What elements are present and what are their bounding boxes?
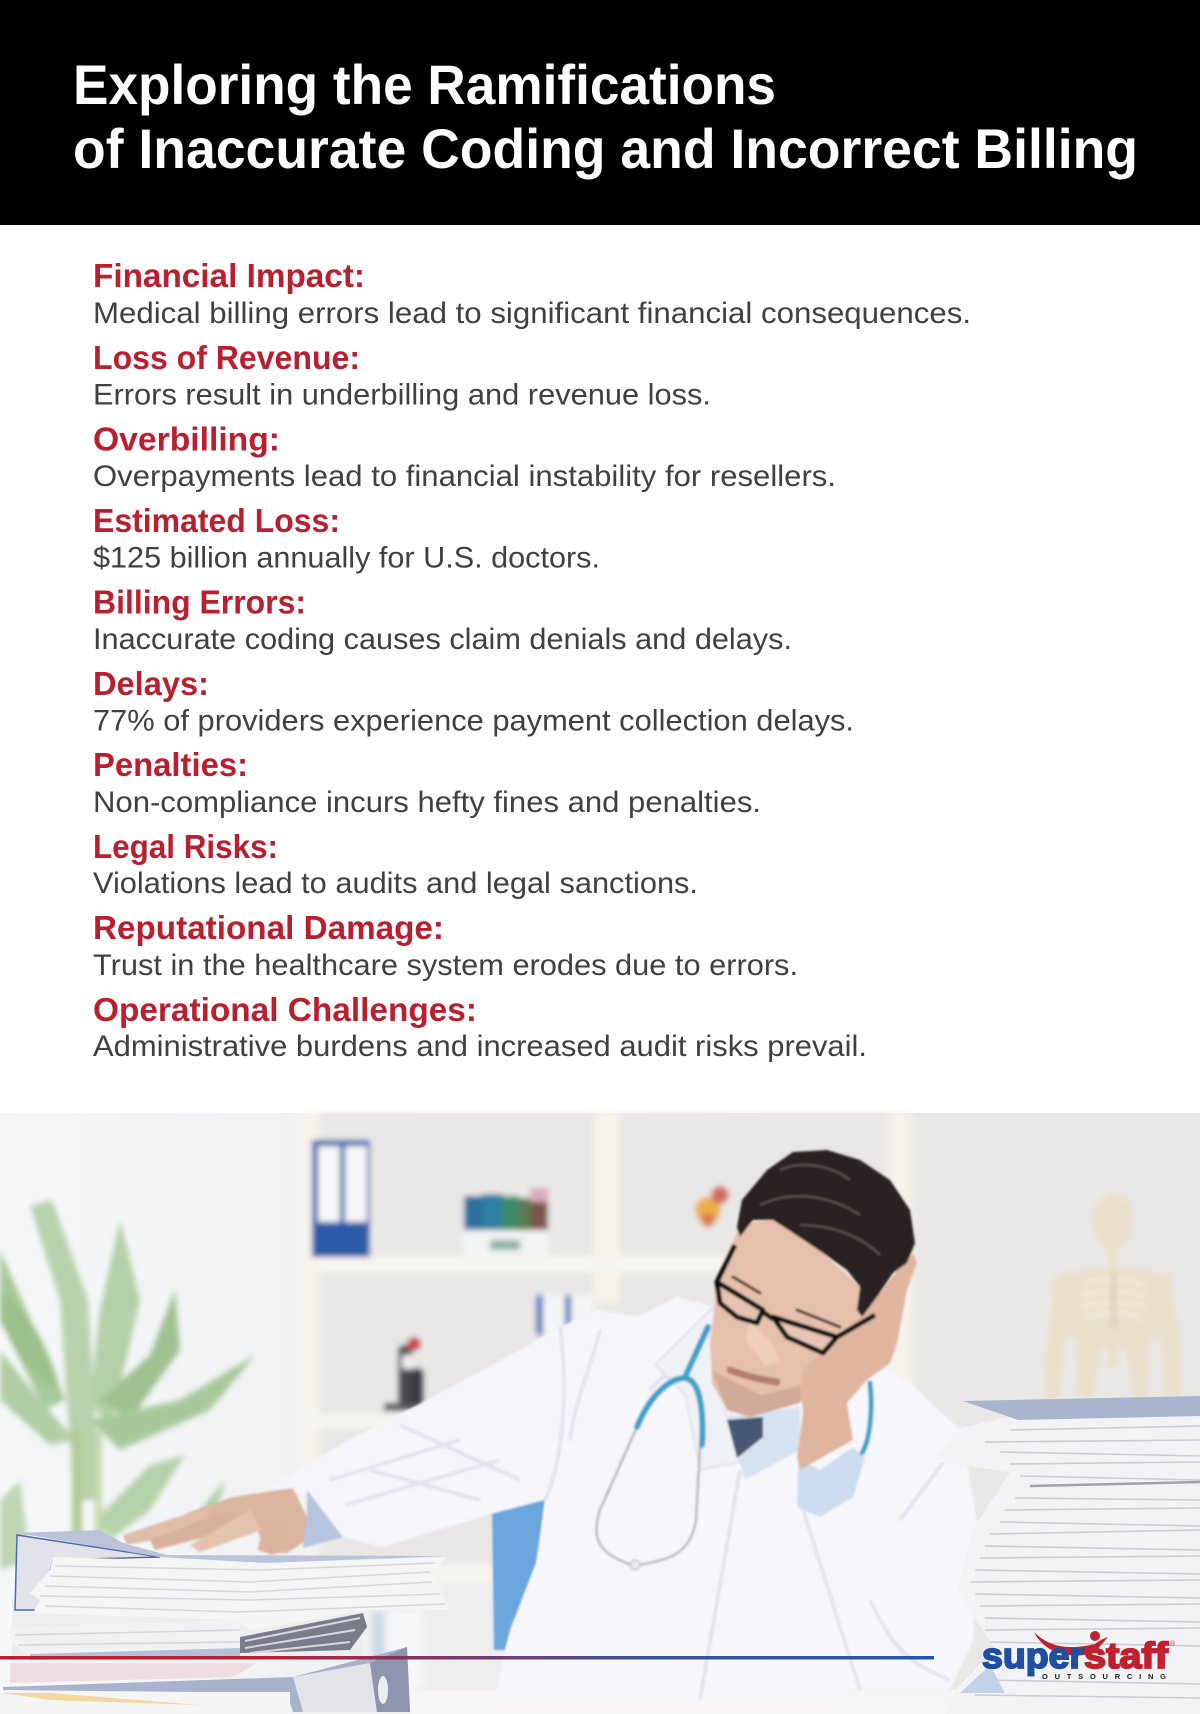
binders under desk <box>372 1612 422 1688</box>
item: loss of revenue: Loss of Revenue: <box>93 339 360 376</box>
item: overbilling: Overbilling: <box>93 420 280 458</box>
desk <box>410 1690 1200 1714</box>
item: estimated loss <box>93 502 600 574</box>
title: Exploring the Ramifications <box>73 53 776 116</box>
logo: superstaff outsourcing: ® <box>1170 1640 1176 1648</box>
title <box>73 53 1138 180</box>
doctor <box>123 1150 978 1700</box>
icon: skeleton model <box>1044 1194 1182 1400</box>
item: billing errors <box>93 584 792 656</box>
item: operational challenges: Operational Challenges: <box>93 991 477 1028</box>
spiral notebook <box>240 1613 367 1653</box>
blurred plant <box>0 1200 255 1570</box>
icon: microscope <box>384 1337 424 1411</box>
photo: stressed doctor at desk with paper stacks <box>0 1113 1200 1714</box>
item: operational challenges: Administrative burdens and increased audit risks prevail. <box>93 1030 867 1063</box>
item: financial impact <box>93 257 971 330</box>
item: delays: 77% of providers experience payment collection delays. <box>93 704 854 738</box>
item: loss of revenue: Errors result in underbilling and revenue loss. <box>93 378 711 412</box>
red to blue rule <box>0 1656 934 1660</box>
left paper stack <box>0 1530 450 1714</box>
icon: anatomical model <box>695 1186 729 1227</box>
icon: test tube rack <box>462 1188 548 1258</box>
face <box>710 1220 860 1417</box>
item: financial impact: Medical billing errors lead to significant financial consequences. <box>93 297 971 330</box>
item: penalties: Non-compliance incurs hefty fines and penalties. <box>93 786 761 819</box>
logo: superstaff outsourcing: super <box>982 1635 1084 1676</box>
arm cuff <box>797 1447 865 1517</box>
resting hand on binder <box>123 1488 307 1555</box>
item: estimated loss: $125 billion annually for U.S. doctors. <box>93 542 600 574</box>
item: penalties: Penalties: <box>93 746 248 783</box>
logo: superstaff outsourcing: OUTSOURCING <box>1042 1672 1166 1681</box>
eyebrows and mouth <box>730 1277 840 1382</box>
sleeve cuff <box>303 1490 343 1548</box>
glasses <box>717 1245 875 1353</box>
item: financial impact: Financial Impact: <box>93 257 365 294</box>
header band <box>0 0 1200 225</box>
item: legal risks <box>93 828 698 900</box>
item: penalties <box>93 746 761 819</box>
logo: superstaff outsourcing <box>982 1631 1176 1681</box>
hair <box>737 1150 915 1317</box>
item: delays: Delays: <box>93 665 209 702</box>
icon: blue binders <box>312 1140 370 1257</box>
list of consequences <box>93 257 971 1063</box>
item: reputational damage <box>93 909 798 982</box>
item: operational challenges <box>93 991 867 1063</box>
item: legal risks: Violations lead to audits and legal sanctions. <box>93 867 698 900</box>
shirt and tie <box>720 1397 800 1480</box>
coat folds <box>330 1327 960 1700</box>
item: delays <box>93 665 854 738</box>
item: legal risks: Legal Risks: <box>93 828 278 865</box>
item: billing errors: Inaccurate coding causes claim denials and delays. <box>93 623 792 656</box>
logo: superstaff outsourcing: staff <box>1084 1635 1169 1676</box>
icon: lower binder <box>536 1295 593 1335</box>
blurred office background <box>302 1113 1182 1688</box>
right paper stack <box>934 1396 1200 1714</box>
item: reputational damage: Reputational Damage: <box>93 909 444 946</box>
item: overbilling <box>93 420 836 493</box>
title: of Inaccurate Coding and Incorrect Billing <box>73 117 1138 180</box>
hand on head <box>797 1253 917 1470</box>
item: overbilling: Overpayments lead to financial instability for resellers. <box>93 460 836 493</box>
item: reputational damage: Trust in the healthcare system erodes due to errors. <box>93 949 798 982</box>
coat lapel <box>655 1307 740 1470</box>
chair <box>492 1480 547 1650</box>
item: estimated loss: Estimated Loss: <box>93 502 340 539</box>
item: loss of revenue <box>93 339 711 412</box>
stethoscope <box>596 1327 871 1570</box>
item: billing errors: Billing Errors: <box>93 584 306 620</box>
coat <box>267 1297 978 1700</box>
